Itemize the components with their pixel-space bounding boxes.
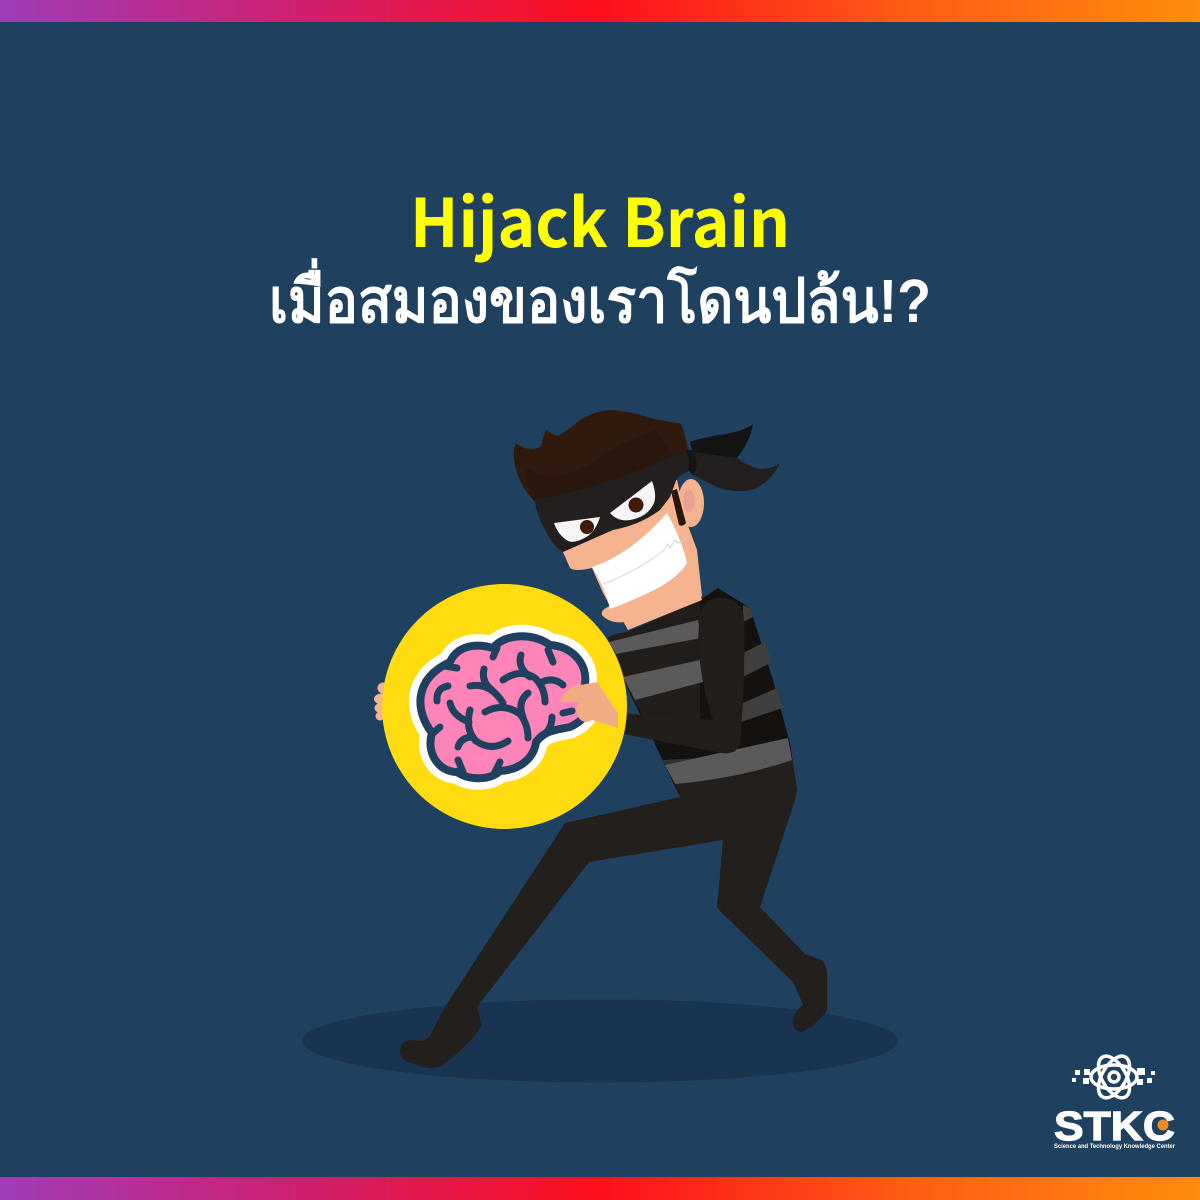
brain creases	[432, 648, 572, 772]
finger 1	[378, 682, 388, 694]
mask tail lower	[693, 452, 780, 491]
stripe back 2	[741, 688, 782, 722]
crease 18	[495, 762, 500, 772]
thief legs	[400, 790, 827, 1068]
torso front panel	[608, 600, 700, 735]
thief hand over brain	[560, 682, 618, 728]
top gradient bar	[0, 0, 1200, 22]
crease 8	[521, 693, 528, 717]
stripe back 1	[743, 642, 772, 677]
left pupil	[580, 520, 594, 534]
crease 1	[437, 686, 448, 701]
bottom gradient bar	[0, 1177, 1200, 1200]
ground shadow	[302, 1000, 898, 1082]
right eye	[610, 481, 655, 520]
stripe front 1	[609, 620, 701, 654]
crease 19	[563, 711, 572, 713]
atom orbit 1	[1091, 1065, 1137, 1089]
crease 13	[548, 650, 553, 662]
crease 12	[493, 648, 497, 657]
atom orbit 2	[1092, 1051, 1136, 1103]
mask tail upper	[690, 424, 753, 458]
title line: Hijack Brain: Hijack Brain	[410, 170, 790, 267]
thief arm	[618, 598, 744, 753]
brain body	[420, 636, 590, 778]
hair shading	[526, 430, 672, 502]
teeth line	[603, 538, 687, 584]
mask knot	[686, 450, 697, 475]
thief face	[563, 480, 702, 622]
crease 11	[540, 680, 563, 685]
torso hem	[675, 760, 797, 797]
yellow circle	[382, 584, 627, 829]
thief neck	[618, 560, 702, 630]
stripe bottom	[665, 738, 792, 784]
title	[269, 170, 931, 335]
left eye	[554, 517, 600, 542]
finger 2	[374, 694, 390, 704]
brain white outline	[420, 636, 590, 778]
icon: brain	[420, 636, 590, 778]
thief torso	[608, 588, 797, 797]
thief left fingers	[374, 682, 390, 720]
atom orbit 3	[1092, 1051, 1136, 1103]
thief ear	[678, 479, 704, 527]
title line: Thai subtitle: เมื่อสมองของเราโดนปล้น!?	[269, 258, 931, 335]
finger 4	[376, 712, 384, 720]
thief mask	[535, 450, 694, 552]
crease 16	[432, 727, 440, 734]
logo wordmark: STKC	[1054, 1103, 1175, 1149]
finger 3	[374, 703, 388, 713]
logo tagline: Science and Technology Knowledge Center	[1054, 1144, 1176, 1150]
icon: thief	[374, 410, 827, 1068]
crease 15	[540, 717, 552, 738]
crease 14	[445, 666, 457, 668]
crease 9	[503, 673, 545, 702]
crease 7	[485, 707, 528, 738]
ear inner	[683, 490, 695, 512]
thief hair	[514, 410, 688, 502]
crease 5	[470, 685, 503, 703]
logo orange dot	[1158, 1120, 1168, 1130]
crease 6	[483, 669, 492, 690]
right dots	[1137, 1068, 1155, 1085]
crease 3	[468, 710, 508, 746]
right pupil	[628, 498, 644, 512]
shoulder patch	[743, 605, 753, 622]
crease 10	[520, 655, 530, 677]
stripe shade	[663, 738, 788, 765]
left dots	[1072, 1069, 1090, 1084]
sweater stripes	[609, 605, 792, 784]
logo atom icon	[1091, 1051, 1137, 1103]
thief sideburn	[671, 489, 686, 526]
logo dots	[1072, 1068, 1155, 1085]
atom nucleus	[1109, 1072, 1119, 1082]
logo: STKC	[1054, 1051, 1176, 1150]
stripe front 2	[623, 660, 703, 700]
crease 17	[458, 760, 463, 772]
thief teeth	[592, 513, 687, 609]
crease 2	[450, 703, 469, 722]
crease 4	[458, 737, 473, 747]
